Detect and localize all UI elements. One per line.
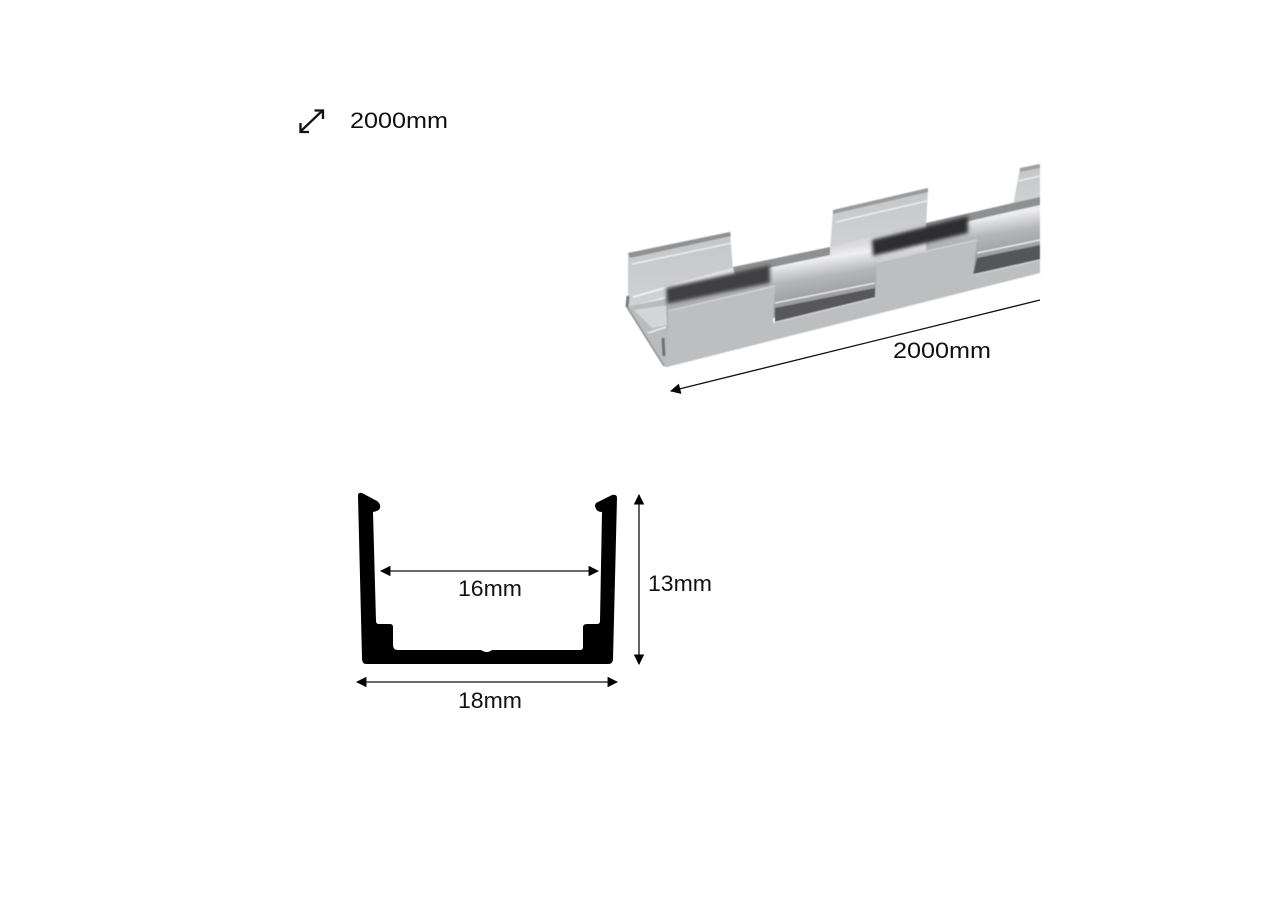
height label: 13mm <box>648 571 712 596</box>
channel interior <box>665 197 1040 340</box>
top rim of back wall <box>733 247 830 275</box>
icon: diagonal double arrow <box>300 110 323 132</box>
length label: 2000mm <box>893 338 991 363</box>
product image: slotted aluminium rail <box>627 164 1040 367</box>
inner width arrow <box>381 570 598 572</box>
dimension: rail length <box>671 300 1040 391</box>
back wall tabs <box>628 164 1040 310</box>
channel floor at the cut end <box>627 296 668 367</box>
lower dark strips <box>775 288 875 323</box>
cross-section diagram <box>357 493 712 713</box>
height arrow <box>638 495 640 664</box>
outer width arrow <box>357 681 617 683</box>
inner width label: 16mm <box>458 576 522 601</box>
length value: 2000mm <box>350 108 448 133</box>
profile silhouette <box>358 493 617 664</box>
length arrow <box>671 300 1040 391</box>
dark shadow bands <box>666 265 770 304</box>
front wall with notches <box>667 240 1040 367</box>
outer width label: 18mm <box>458 688 522 713</box>
top length label with diagonal arrow icon <box>300 108 448 133</box>
